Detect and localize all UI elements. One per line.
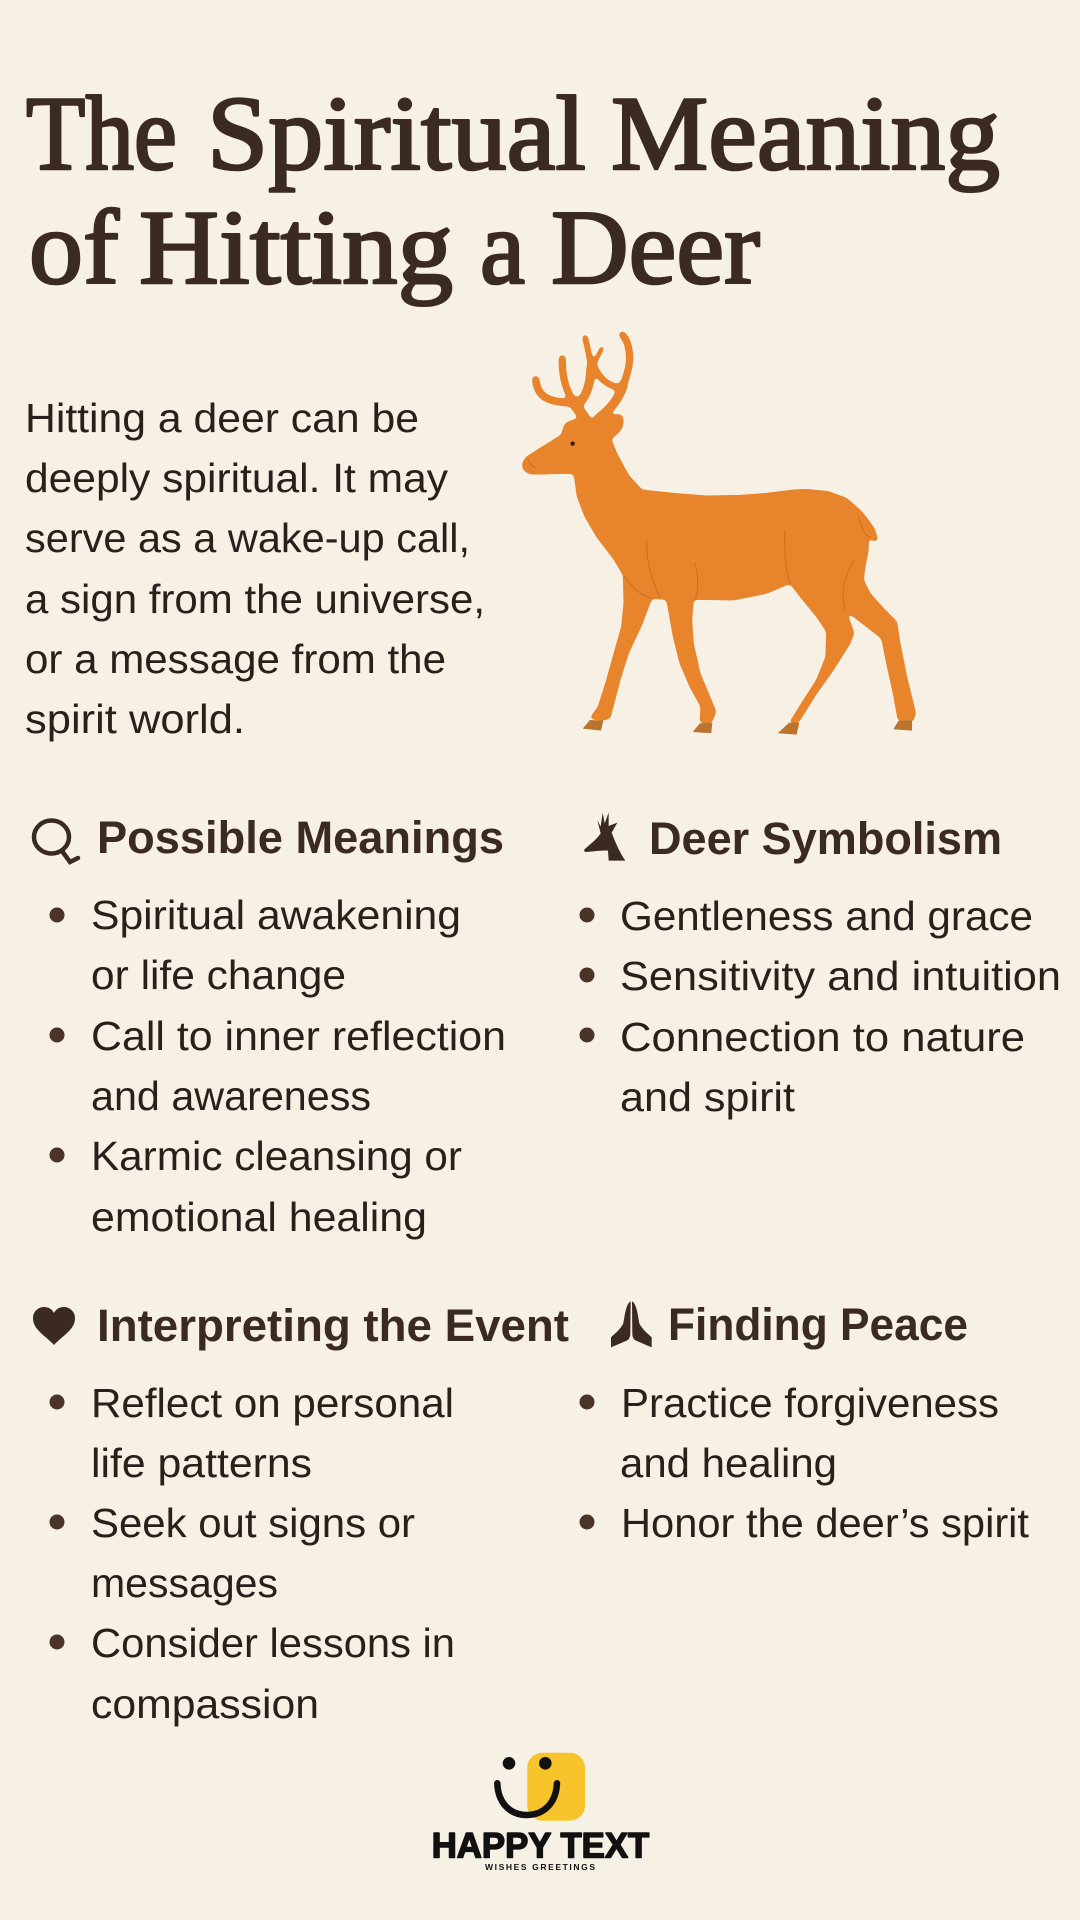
list: deer symbolism: Sensitivity and intuition: [620, 953, 1061, 999]
list: interpreting the event: [50, 1380, 455, 1727]
intro text block: Hitting a deer can be: [25, 395, 419, 441]
title: of: [29, 189, 120, 306]
list: deer symbolism: and spirit: [620, 1074, 796, 1120]
list: possible meanings: [50, 892, 506, 1240]
list: possible meanings: Spiritual awakening: [91, 892, 461, 938]
logo wordmark: HAPPY TEXT: [432, 1827, 649, 1866]
icon: deer head: [584, 813, 625, 861]
title: [26, 75, 1000, 306]
list: deer symbolism: Connection to nature: [620, 1014, 1025, 1060]
list: possible meanings: emotional healing: [91, 1194, 427, 1240]
title: Hitting: [139, 189, 453, 306]
intro text block: a sign from the universe,: [25, 576, 485, 622]
title: Spiritual: [207, 75, 586, 192]
heading: interpreting the event: Interpreting the Event: [97, 1300, 569, 1351]
heading: possible meanings: Possible Meanings: [97, 812, 504, 863]
list: deer symbolism: [580, 893, 1061, 1120]
list: finding peace: Practice forgiveness: [621, 1380, 999, 1426]
list: interpreting the event: life patterns: [91, 1440, 312, 1486]
list: possible meanings: Karmic cleansing or: [91, 1133, 462, 1179]
intro text block: serve as a wake-up call,: [25, 515, 470, 561]
panel: interpreting the event: [33, 1300, 569, 1727]
title: Meaning: [611, 75, 1000, 192]
list: deer symbolism: Gentleness and grace: [620, 893, 1033, 939]
list: interpreting the event: Consider lessons in: [91, 1620, 455, 1666]
panel: deer symbolism: [580, 813, 1061, 1120]
heading: deer symbolism: Deer Symbolism: [649, 813, 1002, 864]
intro text block: or a message from the: [25, 636, 446, 682]
logo tagline: WISHES GREETINGS: [485, 1862, 595, 1872]
title: a: [480, 189, 525, 306]
intro text block: spirit world.: [25, 696, 245, 742]
panel: finding peace: [580, 1299, 1030, 1546]
title: The: [26, 75, 177, 192]
heading: finding peace: Finding Peace: [668, 1299, 968, 1350]
illustration: orange deer: [522, 335, 916, 735]
icon: heart: [33, 1307, 75, 1345]
list: possible meanings: Call to inner reflection: [91, 1013, 506, 1059]
icon: magnifying glass: [34, 820, 78, 862]
list: interpreting the event: messages: [91, 1560, 278, 1606]
icon: praying hands: [611, 1301, 652, 1347]
list: possible meanings: or life change: [91, 952, 346, 998]
icon: smiley: [497, 1753, 585, 1821]
list: finding peace: and healing: [620, 1440, 837, 1486]
list: possible meanings: and awareness: [91, 1073, 371, 1119]
list: finding peace: [580, 1380, 1030, 1546]
list: finding peace: Honor the deer’s spirit: [621, 1500, 1030, 1546]
intro text block: [25, 395, 485, 742]
list: interpreting the event: Seek out signs or: [91, 1500, 415, 1546]
list: interpreting the event: compassion: [91, 1681, 319, 1727]
title: Deer: [551, 189, 760, 306]
intro text block: deeply spiritual. It may: [25, 455, 449, 501]
logo: happy text: [432, 1753, 649, 1872]
panel: possible meanings: [34, 812, 506, 1240]
list: interpreting the event: Reflect on personal: [91, 1380, 454, 1426]
